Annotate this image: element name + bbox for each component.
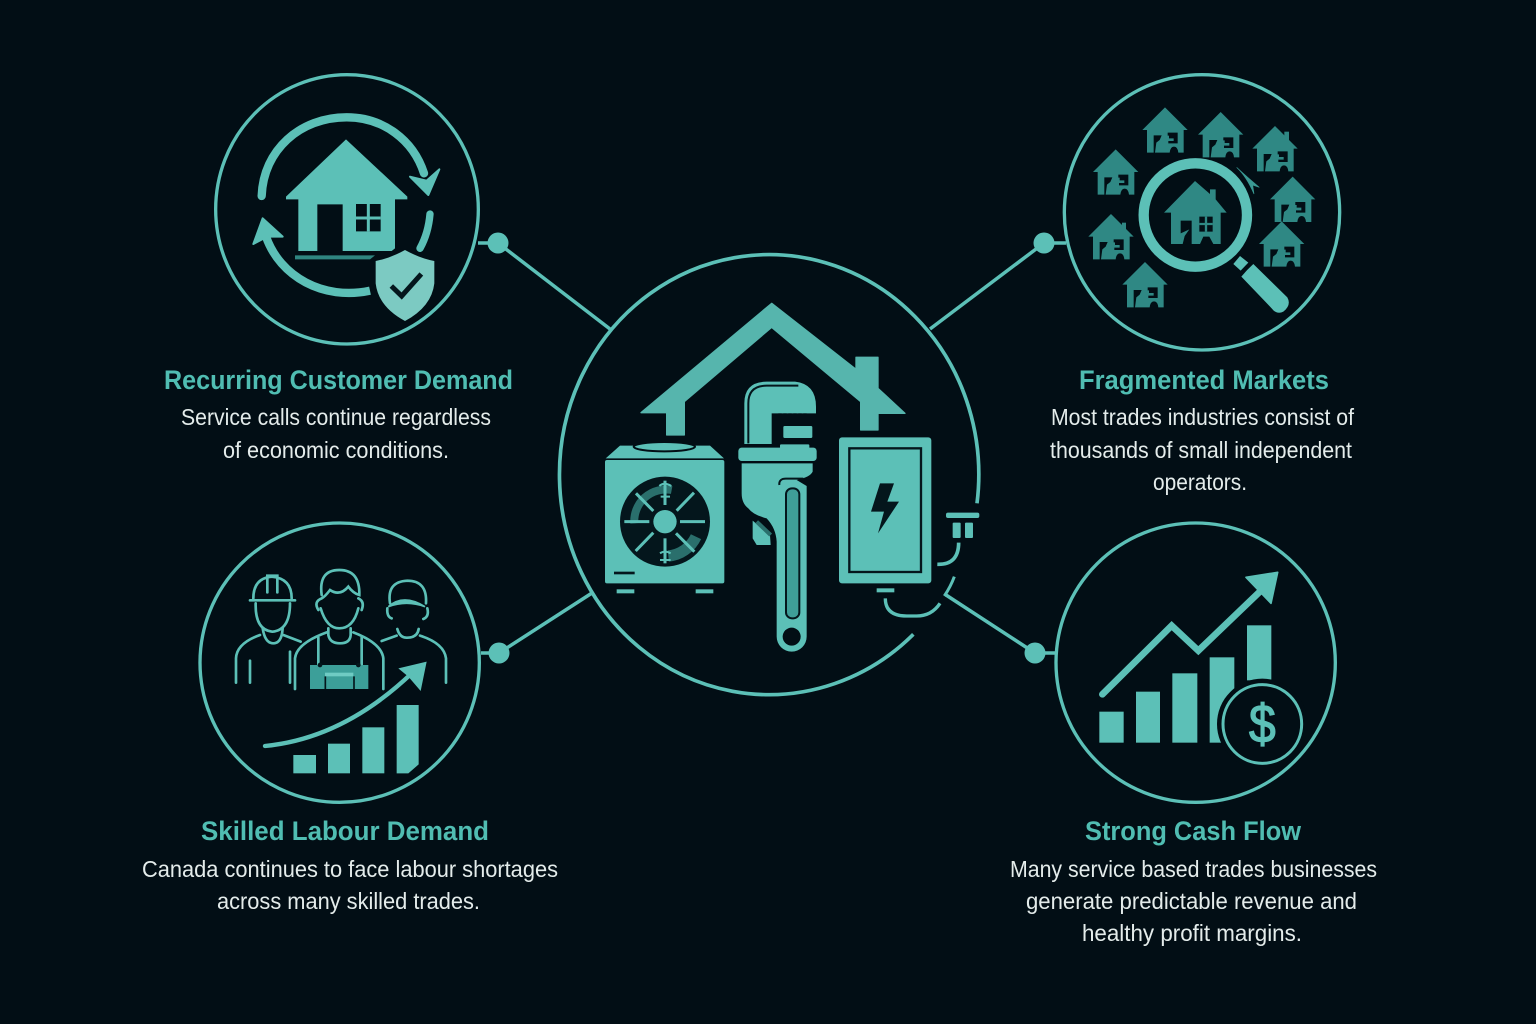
icon: overalls bib	[310, 663, 368, 689]
panel: fragmented markets icon	[1064, 75, 1340, 350]
icon: house	[286, 139, 407, 251]
heading: Fragmented Markets	[1079, 365, 1329, 395]
icon: power plug and cable	[885, 513, 979, 616]
hub ring	[559, 255, 979, 695]
body line 1: Most trades industries consist of	[1051, 404, 1355, 430]
heading: Strong Cash Flow	[1085, 816, 1302, 846]
icon: dollar coin: $	[1249, 696, 1276, 755]
icon: magnifying glass	[1144, 163, 1289, 313]
outer ring	[1064, 75, 1340, 350]
body line 1: Many service based trades businesses	[1010, 856, 1377, 882]
body line 2: across many skilled trades.	[217, 888, 480, 914]
outer ring	[200, 523, 479, 802]
icon: dollar coin	[1217, 679, 1308, 769]
icon: trend arrow	[1102, 572, 1278, 694]
connector: cash flow to centre	[946, 595, 1057, 664]
icon: heat pump unit	[605, 442, 724, 593]
text: recurring customer demand	[164, 365, 513, 463]
connector: fragmented markets to centre	[930, 232, 1066, 329]
centre hub: trades icon	[559, 255, 979, 695]
icon: cap brim	[388, 600, 425, 607]
icon: central house	[1164, 181, 1227, 244]
hub ring fragment	[944, 577, 954, 596]
icon: three workers	[236, 570, 446, 689]
icon: circular arrows	[253, 117, 439, 293]
text: skilled labour demand	[142, 816, 558, 914]
bar chart	[293, 705, 419, 773]
body line 3: operators.	[1153, 469, 1247, 495]
connector: recurring demand to centre	[478, 232, 610, 329]
heading: Skilled Labour Demand	[201, 816, 489, 846]
body line 1: Service calls continue regardless	[181, 404, 491, 430]
icon: shield with check	[376, 250, 434, 321]
text: fragmented markets	[1050, 365, 1355, 495]
bar chart	[1099, 625, 1271, 743]
connector: skilled labour to centre	[481, 593, 592, 664]
icon: scattered small houses	[1088, 107, 1315, 307]
panel: skilled labour icon	[200, 523, 479, 802]
heading: Recurring Customer Demand	[164, 365, 513, 395]
outer ring	[216, 75, 478, 344]
body line 3: healthy profit margins.	[1082, 920, 1302, 946]
body line 1: Canada continues to face labour shortages	[142, 856, 558, 882]
icon: central house window bars	[1199, 217, 1213, 232]
icon: growth arrow	[265, 662, 427, 746]
icon: house ground line	[295, 255, 375, 259]
body line 2: thousands of small independent	[1050, 437, 1353, 463]
body line 2: generate predictable revenue and	[1026, 888, 1357, 914]
panel: recurring customer demand icon	[216, 75, 478, 344]
icon: house window bars	[356, 204, 381, 231]
outer ring	[1056, 523, 1335, 802]
icon: house roof and chimney	[641, 303, 905, 435]
body line 2: of economic conditions.	[223, 437, 449, 463]
text: strong cash flow	[1010, 816, 1377, 946]
icon: pipe wrench	[738, 382, 817, 652]
panel: strong cash flow icon	[1056, 523, 1335, 802]
icon: electrical panel	[839, 437, 931, 592]
